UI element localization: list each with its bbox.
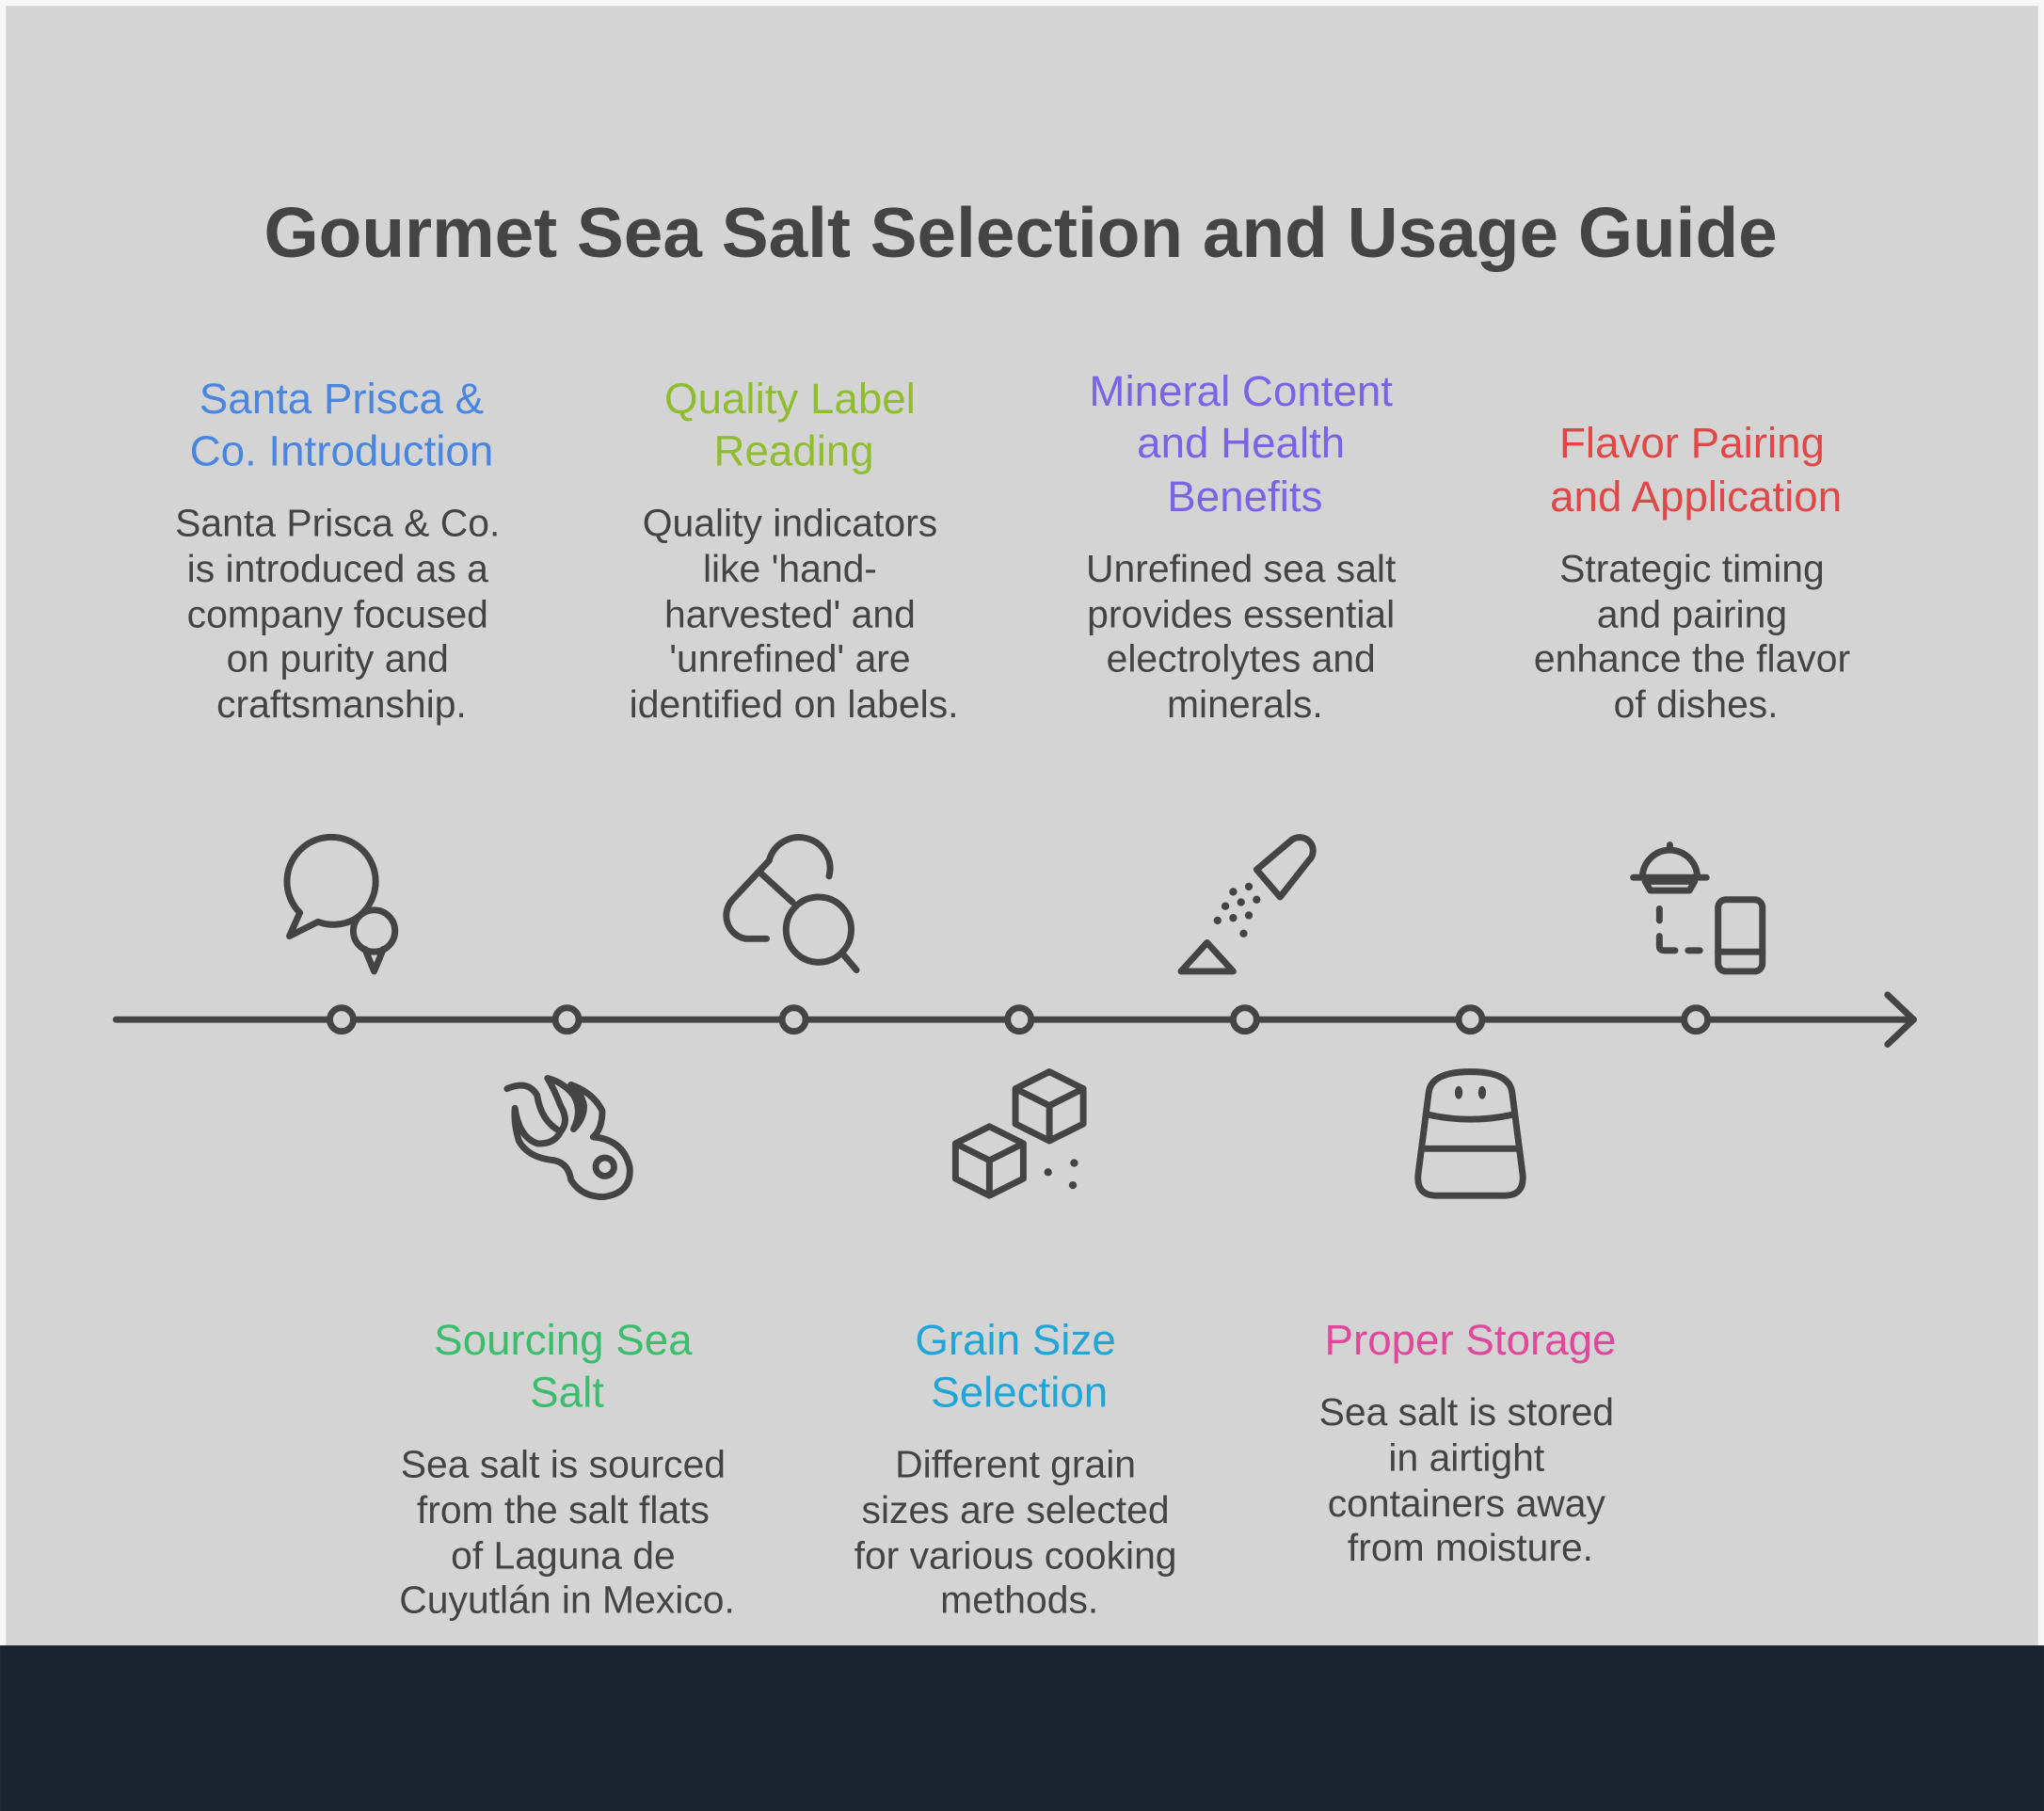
text: Santa Prisca intro: craftsmanship. bbox=[216, 682, 467, 726]
text: Flavor pairing: enhance the flavor bbox=[1534, 636, 1850, 680]
text: Grain size bbox=[854, 1316, 1177, 1621]
text: Santa Prisca intro: is introduced as a bbox=[187, 547, 488, 590]
text: Flavor pairing: and Application bbox=[1550, 473, 1842, 521]
text: Sourcing sea salt bbox=[399, 1316, 735, 1621]
text: Quality label reading: Reading bbox=[713, 427, 874, 475]
text: Mineral content: electrolytes and bbox=[1107, 636, 1376, 680]
text: Proper storage bbox=[1319, 1316, 1616, 1569]
icon: speech bubble with pin bbox=[287, 837, 395, 971]
text: Grain size: Selection bbox=[931, 1369, 1108, 1417]
text: Sourcing sea salt: of Laguna de bbox=[451, 1533, 676, 1577]
text: Sourcing sea salt: Sea salt is sourced bbox=[401, 1442, 726, 1485]
text: Grain size: sizes are selected bbox=[862, 1488, 1170, 1531]
title: Gourmet Sea Salt Selection and Usage Guide bbox=[263, 193, 1778, 272]
text: Mineral content: Unrefined sea salt bbox=[1086, 547, 1397, 590]
icon: cloche and phone bbox=[1634, 845, 1763, 971]
text: Sourcing sea salt: Sourcing Sea bbox=[434, 1316, 693, 1364]
text: Quality label reading: 'unrefined' are bbox=[669, 636, 911, 680]
icon: salt cubes bbox=[955, 1072, 1083, 1195]
text: Sourcing sea salt: Salt bbox=[530, 1369, 604, 1417]
text: Proper storage: from moisture. bbox=[1348, 1526, 1593, 1569]
text: Quality label reading: like 'hand- bbox=[703, 547, 877, 590]
text: Grain size: Grain Size bbox=[915, 1316, 1116, 1364]
icon: pill with magnifier bbox=[727, 838, 856, 970]
text: Quality label reading: Quality indicators bbox=[643, 501, 937, 544]
text: Grain size: Different grain bbox=[895, 1442, 1136, 1485]
timeline bbox=[116, 995, 1913, 1045]
text: Mineral content: Mineral Content bbox=[1089, 367, 1393, 415]
text: Proper storage: Proper Storage bbox=[1325, 1316, 1616, 1364]
text: Flavor pairing bbox=[1534, 419, 1850, 726]
text: Quality label reading: identified on labels. bbox=[630, 682, 959, 726]
text: Flavor pairing: of dishes. bbox=[1614, 682, 1779, 726]
text: Grain size: methods. bbox=[940, 1578, 1098, 1621]
text: Sourcing sea salt: from the salt flats bbox=[417, 1488, 710, 1531]
text: Santa Prisca intro: on purity and bbox=[227, 636, 449, 680]
text: Proper storage: containers away bbox=[1328, 1482, 1606, 1525]
text: Proper storage: in airtight bbox=[1388, 1435, 1545, 1479]
text: Flavor pairing: Flavor Pairing bbox=[1559, 419, 1825, 467]
text: Quality label reading bbox=[630, 375, 959, 726]
icon: octopus bbox=[507, 1079, 630, 1197]
text: Mineral content bbox=[1086, 367, 1397, 726]
text: Grain size: for various cooking bbox=[854, 1533, 1177, 1577]
footer band bbox=[0, 1645, 2044, 1811]
text: Mineral content: Benefits bbox=[1167, 473, 1322, 521]
text: Sourcing sea salt: Cuyutlán in Mexico. bbox=[399, 1578, 735, 1621]
text: Flavor pairing: and pairing bbox=[1597, 592, 1787, 635]
text: Flavor pairing: Strategic timing bbox=[1559, 547, 1825, 590]
text: Quality label reading: harvested' and bbox=[664, 592, 916, 635]
text: Santa Prisca intro: Santa Prisca & bbox=[200, 375, 484, 423]
text: Santa Prisca intro: Santa Prisca & Co. bbox=[175, 501, 500, 544]
text: Santa Prisca intro bbox=[175, 375, 500, 726]
text: Mineral content: provides essential bbox=[1087, 592, 1395, 635]
icon: salt jar bbox=[1418, 1072, 1523, 1195]
text: Mineral content: minerals. bbox=[1167, 682, 1323, 726]
icon: salt shaker pouring bbox=[1181, 838, 1313, 971]
text: Mineral content: and Health bbox=[1137, 419, 1345, 467]
text: Proper storage: Sea salt is stored bbox=[1319, 1390, 1614, 1434]
text: Santa Prisca intro: company focused bbox=[187, 592, 488, 635]
text: Quality label reading: Quality Label bbox=[664, 375, 916, 423]
text: Santa Prisca intro: Co. Introduction bbox=[190, 427, 493, 475]
